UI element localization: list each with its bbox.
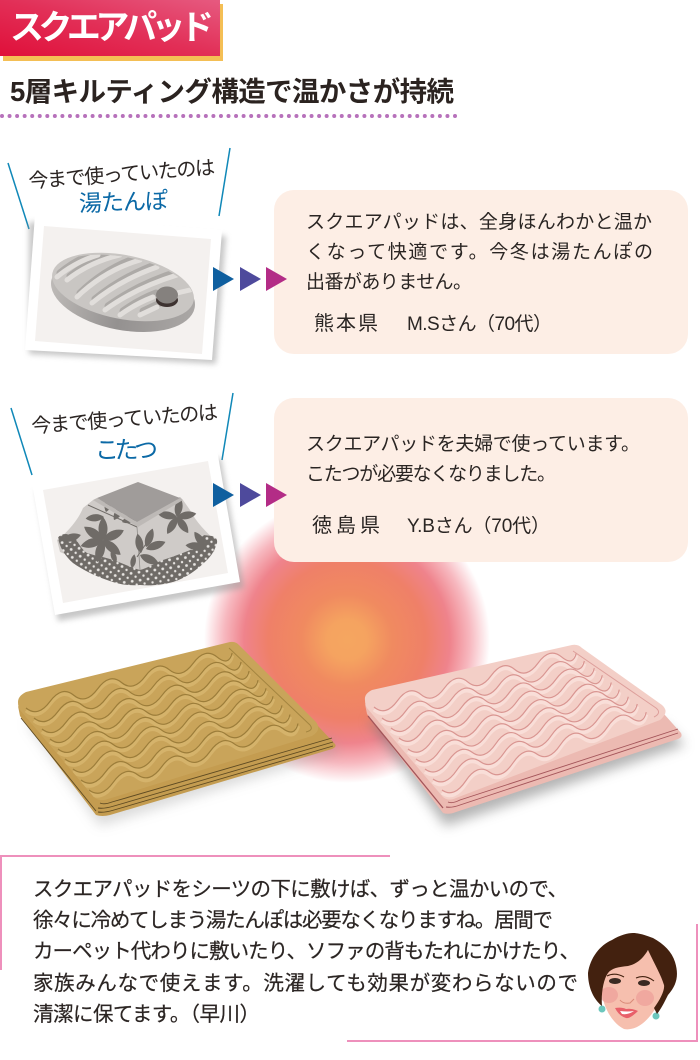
panel: testimonial 1: 熊本県 bbox=[314, 312, 378, 335]
arrows: before to after bbox=[213, 267, 287, 291]
panel: testimonial 2: こたつが必要なくなりました。 bbox=[306, 463, 556, 485]
heading: 5層キルティング構造で温かさが持続 bbox=[10, 76, 454, 107]
banner: product name bbox=[0, 0, 223, 61]
panel: testimonial 2: 徳島県 bbox=[312, 514, 380, 537]
dotted divider bbox=[2, 114, 458, 118]
callout: hot water bottle label bbox=[8, 148, 230, 229]
text block: expert comment: スクエアパッドをシーツの下に敷けば、ずっと温かいので、 bbox=[33, 878, 568, 901]
banner: product name: スクエアパッド bbox=[10, 9, 214, 47]
panel: testimonial 1 bbox=[274, 190, 688, 354]
arrows: before to after bbox=[213, 483, 287, 507]
callout: kotatsu label: こたつ bbox=[95, 437, 158, 464]
text block: expert comment: 清潔に保てます。（早川） bbox=[33, 1003, 260, 1026]
callout: kotatsu label: 今まで使っていたのは bbox=[31, 401, 219, 438]
panel: testimonial 2: スクエアパッドを夫婦で使っています。 bbox=[306, 433, 640, 455]
panel: testimonial 1: くなって快適です。今冬は湯たんぽの bbox=[306, 241, 653, 263]
panel: testimonial 2 bbox=[274, 398, 688, 562]
text block: expert comment: 家族みんなで使えます。洗濯しても効果が変わらないので bbox=[33, 972, 578, 995]
icon: hot water bottle bbox=[51, 252, 195, 332]
icon: portrait of Hayakawa bbox=[588, 933, 677, 1029]
text block: expert comment: 徐々に冷めてしまう湯たんぽは必要なくなりますね。居間で bbox=[33, 909, 553, 932]
heat glow bbox=[204, 497, 490, 783]
panel: testimonial 1: 出番がありません。 bbox=[306, 271, 472, 293]
panel: testimonial 1: スクエアパッドは、全身ほんわかと温か bbox=[306, 211, 652, 233]
panel: testimonial 1: M.Sさん（70代） bbox=[407, 313, 552, 335]
panel: expert comment frame bbox=[1, 856, 697, 1041]
product: pink quilted pad bbox=[365, 645, 685, 826]
photo: hot water bottle bbox=[25, 215, 226, 364]
product: gold quilted pad bbox=[18, 642, 340, 826]
icon: kotatsu bbox=[57, 482, 217, 585]
flower pattern bbox=[61, 494, 208, 568]
callout: hot water bottle label: 湯たんぽ bbox=[79, 187, 168, 217]
callout: hot water bottle label: 今まで使っていたのは bbox=[28, 156, 216, 193]
callout: kotatsu label bbox=[11, 393, 233, 475]
text block: expert comment bbox=[33, 878, 580, 1026]
photo: kotatsu bbox=[32, 450, 244, 621]
text block: expert comment: カーペット代わりに敷いたり、ソファの背もたれにかけたり、 bbox=[33, 940, 580, 963]
panel: testimonial 2: Y.Bさん（70代） bbox=[407, 515, 550, 537]
